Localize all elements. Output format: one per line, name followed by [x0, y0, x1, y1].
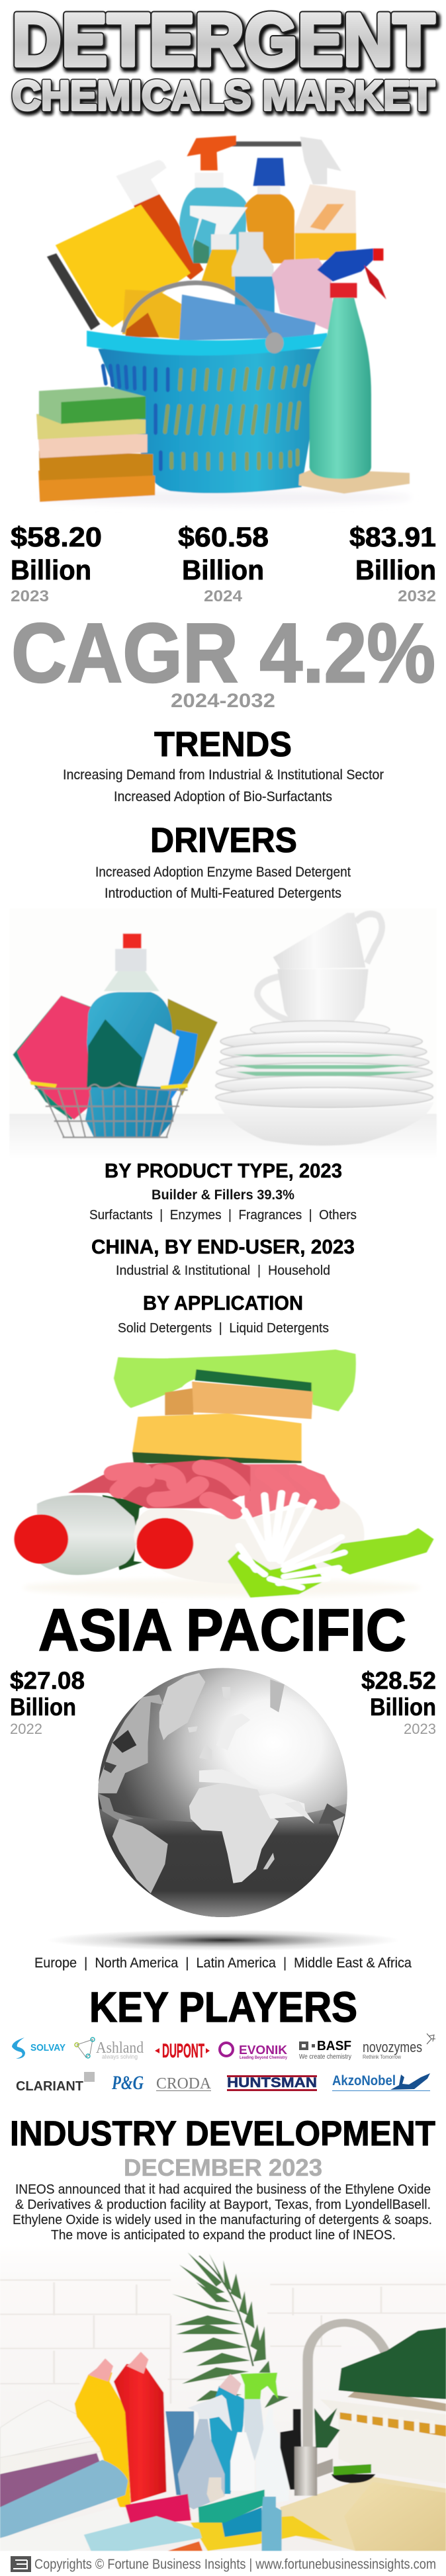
logo: dupont — [155, 2040, 210, 2062]
development description: The move is anticipated to expand the product line of INEOS. — [51, 2227, 396, 2243]
trends: Increasing Demand from Industrial & Institutional Sector — [63, 767, 384, 783]
basket body — [87, 331, 327, 494]
by application: BY APPLICATION — [143, 1291, 303, 1314]
icon: bottle backs — [37, 1495, 364, 1584]
icon: folded towels — [0, 2453, 128, 2551]
icon: small white-blue bottle — [232, 232, 275, 313]
logo: basf — [299, 2039, 351, 2061]
by product type — [89, 1159, 357, 1223]
value 2023 — [11, 521, 102, 605]
icon: soap dispenser — [280, 2409, 302, 2489]
trends: TRENDS — [154, 725, 292, 764]
value 2023: $58.20 — [11, 521, 102, 552]
icon: blue bottle — [209, 2374, 245, 2494]
icon: green brush — [228, 1493, 434, 1598]
value 2023: Billion — [11, 554, 91, 585]
icon: blue cloth roll — [165, 2411, 194, 2495]
region heading: asia pacific: ASIA PACIFIC — [38, 1598, 406, 1664]
logo: basf: We create chemistry — [299, 2053, 351, 2061]
title line: chemicals market: CHEMICALS MARKET — [12, 73, 435, 119]
trends: Increased Adoption of Bio-Surfactants — [114, 789, 332, 804]
china by end-user — [91, 1235, 355, 1278]
logo: p&g: P&G — [111, 2072, 144, 2094]
heading: key players: KEY PLAYERS — [89, 1983, 357, 2031]
icon: red bottle caps — [14, 1514, 193, 1569]
value 2032: 2032 — [398, 587, 436, 605]
logo: novozymes: novozymes — [363, 2039, 422, 2055]
logo: solvay — [12, 2038, 66, 2059]
trends — [63, 725, 384, 804]
value 2032: $83.91 — [349, 521, 436, 552]
icon: soap dish — [332, 2464, 375, 2483]
logo: evonik: Leading Beyond Chemistry — [240, 2056, 288, 2060]
drivers: Increased Adoption Enzyme Based Detergent — [95, 865, 351, 880]
icon: pink cloth — [272, 258, 334, 332]
value 2024: 2024 — [204, 587, 243, 605]
value 2024: $60.58 — [178, 521, 269, 552]
china by end-user: CHINA, BY END-USER, 2023 — [91, 1235, 355, 1258]
value 2022: 2022 — [10, 1721, 42, 1737]
logo: clariant: CLARIANT — [16, 2079, 83, 2094]
by product type: Builder & Fillers 39.3% — [152, 1187, 294, 1203]
value 2023 region: 2023 — [404, 1721, 436, 1737]
icon: cups and plates — [216, 913, 434, 1146]
icon: white bottles — [207, 2408, 289, 2503]
value 2024 — [178, 521, 269, 605]
drivers: Introduction of Multi-Featured Detergents — [105, 886, 341, 901]
development description: & Derivatives & production facility at Bayport, Texas, from LyondellBasell. — [15, 2197, 431, 2212]
icon: yellow sponge — [132, 1414, 302, 1463]
title line: chemicals market: CHEMICALS MARKET — [12, 73, 435, 119]
icon: white pump bottle — [295, 136, 356, 260]
logo: fortune business insights — [11, 2556, 31, 2572]
logo: ashland: always solving — [102, 2053, 138, 2060]
icon: monstera leaf — [314, 2327, 446, 2483]
china by end-user: Industrial & Institutional | Household — [116, 1264, 330, 1278]
illustration: dish basket and plates — [9, 908, 437, 1160]
value 2023 region: Billion — [370, 1694, 436, 1721]
icon: sink — [280, 2476, 446, 2551]
icon: green spray bottle — [310, 249, 386, 479]
icon: orange spray bottle — [116, 160, 203, 280]
icon: dish soap basket — [13, 933, 218, 1137]
icon: coaster — [298, 469, 410, 494]
logo: ashland — [75, 2038, 144, 2060]
by application — [118, 1291, 329, 1336]
value 2024: Billion — [182, 554, 264, 585]
logo: basf: BASF — [317, 2039, 351, 2053]
icon: sponges — [84, 2489, 333, 2551]
logo: croda: CRODA — [156, 2075, 212, 2092]
illustration: sponges, gloves and bottles — [14, 1350, 434, 1598]
logo: solvay: SOLVAY — [30, 2042, 66, 2053]
logo: huntsman: HUNTSMAN — [227, 2075, 317, 2090]
value 2023: 2023 — [11, 587, 49, 605]
by product type: Surfactants | Enzymes | Fragrances | Others — [89, 1208, 357, 1223]
company logos — [12, 2034, 435, 2094]
cagr: 2024-2032 — [171, 690, 275, 712]
development description — [13, 2182, 432, 2243]
icon: yellow scrub brush — [47, 204, 191, 330]
logo: evonik: EVONIK — [239, 2043, 287, 2057]
icon: green spray bottle — [240, 2373, 278, 2461]
by product type: BY PRODUCT TYPE, 2023 — [105, 1159, 342, 1182]
icon: towels — [0, 2400, 107, 2475]
logo: clariant — [16, 2072, 95, 2094]
icon: gloves — [122, 290, 182, 339]
market values — [11, 521, 436, 605]
icon: white spray yellow bottle — [190, 206, 247, 293]
value 2022: Billion — [10, 1694, 76, 1721]
icon: palm plant — [172, 2253, 289, 2408]
logo: dupont: DUPONT — [162, 2040, 204, 2062]
logo: akzonobel — [332, 2073, 430, 2091]
value 2023 region: $28.52 — [361, 1667, 436, 1694]
icon: blue bottle — [179, 136, 247, 263]
icon: amber bottle — [245, 158, 294, 263]
icon: red bottle — [88, 2352, 166, 2503]
by application: Solid Detergents | Liquid Detergents — [118, 1321, 329, 1336]
value 2023 region — [361, 1667, 436, 1737]
title — [12, 0, 437, 122]
icon: pink gloves — [68, 1459, 340, 1520]
value 2022 — [10, 1667, 85, 1737]
drivers — [95, 821, 351, 901]
icon: pale blue spray bottle — [178, 2395, 232, 2509]
icon: brown sponge — [165, 1369, 313, 1419]
icon: yellow bottle — [75, 2368, 131, 2507]
footer — [11, 2556, 436, 2572]
logo: novozymes — [363, 2034, 435, 2060]
logo: evonik — [220, 2043, 288, 2060]
value 2022: $27.08 — [10, 1667, 85, 1694]
illustration: globe — [47, 1668, 400, 1951]
development date: DECEMBER 2023 — [124, 2154, 322, 2181]
value 2032 — [349, 521, 436, 605]
drivers: DRIVERS — [150, 821, 297, 860]
logo: akzonobel: AkzoNobel — [332, 2073, 396, 2088]
icon: green cloth — [114, 1350, 356, 1411]
icon: sponge stack — [36, 387, 155, 502]
title line: chemicals market: CHEMICALS MARKET — [13, 75, 436, 122]
illustration: cleaning basket — [36, 136, 412, 505]
icon: faucet — [294, 2323, 392, 2496]
illustration: kitchen sink with cleaning products — [0, 2243, 446, 2551]
logo: novozymes: Rethink Tomorrow — [363, 2054, 401, 2060]
value 2032: Billion — [355, 554, 436, 585]
icon: blue cloth — [179, 294, 316, 341]
development description: Ethylene Oxide is widely used in the manufacturing of detergents & soaps. — [13, 2212, 432, 2227]
logo: ashland: Ashland — [96, 2039, 144, 2057]
regions list: Europe | North America | Latin America | Middle East & Africa — [34, 1955, 412, 1971]
